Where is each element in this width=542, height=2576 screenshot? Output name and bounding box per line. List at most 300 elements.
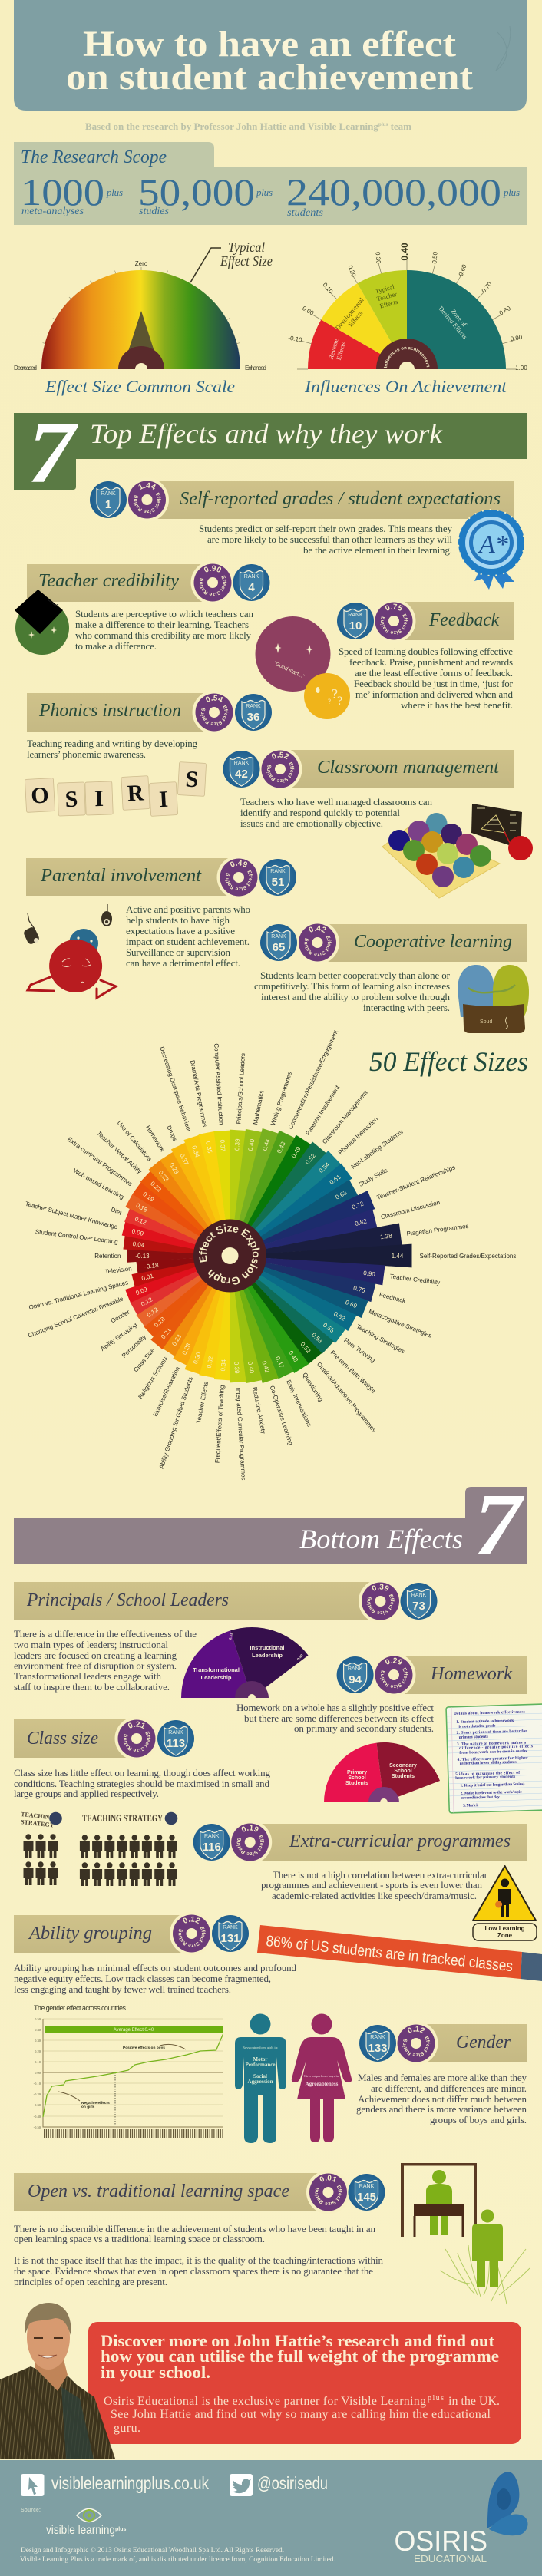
body text: Achievement does not differ much between [358, 2093, 527, 2105]
stat: 240,000,000 plus students: students [287, 207, 324, 219]
wedge values: 0.49 [290, 1145, 302, 1159]
effect size badge: 0.75 [385, 603, 403, 611]
icon: hugging characters in basket: Spud [480, 1019, 492, 1025]
body text: where it has the best benefit. [401, 699, 513, 711]
wedge values: 0.37 [178, 1152, 190, 1167]
chart: leadership fan: Leadership [200, 1674, 232, 1681]
annotations [58, 2044, 186, 2109]
icon: smiling face and yellow character: ? [328, 698, 331, 705]
effect size badge: Effect Size Rating [236, 1835, 264, 1856]
rank badge: 42 [235, 768, 248, 781]
wedge labels: Phonics Instruction [337, 1115, 379, 1156]
body text: There is not a high correlation between extra-curricular [273, 1869, 488, 1881]
body text [254, 969, 451, 1013]
heading: the research scope: The Research Scope [21, 147, 167, 167]
segment labels: Effects [335, 341, 347, 361]
wedge labels: Teacher Verbal Ability [95, 1130, 143, 1175]
body text: There is a difference in the effectiveness of the [14, 1628, 197, 1640]
rank badge: RANK [359, 2184, 375, 2189]
title text: How to have an effect [83, 24, 456, 64]
wedge values: 0.55 [322, 1322, 335, 1334]
subtitle: plus [378, 121, 388, 127]
scale values: 0.90 [510, 334, 524, 342]
effect size badge: 0.19 [241, 1825, 259, 1831]
icon: letter tiles spelling osiris: I [158, 787, 169, 812]
wedge labels: Not-Labelling Students [350, 1128, 404, 1171]
wedge labels: Piagetian Programmes [406, 1223, 469, 1237]
heading: Class size [27, 1729, 98, 1749]
body text: feedback. Praise, punishment and rewards [349, 656, 513, 668]
scale values: 0.30 [374, 252, 382, 264]
wedge values: 0.63 [334, 1189, 349, 1201]
wedge values: 0.30 [192, 1351, 203, 1365]
topic: teacher credibility [15, 563, 270, 655]
icon: male figure with boys' strengths [235, 2014, 286, 2143]
section header: top effects [14, 404, 527, 502]
footer [0, 2460, 542, 2576]
wedge values: 0.22 [149, 1180, 163, 1194]
cta body: Osiris Educational is the exclusive partner for Visible Learning [104, 2395, 426, 2408]
panel: call to action [88, 2322, 521, 2444]
rank badge [260, 924, 297, 961]
icon: large class pictogram [80, 1812, 177, 1886]
wedge labels: Use of Calculators [116, 1119, 153, 1162]
hub: effect size explosion graph: Effect Size Explosion Graph [199, 1224, 259, 1285]
stat: 50,000 plus studies: plus [256, 187, 273, 198]
icon: letter tiles spelling osiris: I [94, 786, 104, 811]
icon: notebook with homework notes: 3. Mark it [463, 1803, 478, 1808]
wedge values: 0.18 [134, 1202, 149, 1214]
wedge labels: Open vs. Traditional Learning Spaces [28, 1279, 129, 1311]
source: visible learning plus logo [21, 2508, 126, 2537]
body text: me’ information and delivered when and [355, 689, 513, 700]
chart: leadership fan: Instructional [250, 1644, 285, 1651]
icon: hugging characters in basket [458, 965, 529, 1033]
wedge values: 0.28 [181, 1342, 193, 1356]
wedge values: 0.69 [344, 1299, 359, 1309]
chart: primary and secondary fan: Students [345, 1781, 368, 1786]
body text: Transformational leaders engage with [14, 1670, 161, 1682]
effect size badge: Effect Size Rating [178, 1927, 206, 1947]
body text: issues and are emotionally objective. [240, 817, 383, 829]
caption: effect size common scale: Effect Size Common Scale [45, 377, 235, 396]
icon: male figure with boys' strengths: Performance [246, 2062, 275, 2068]
chart: primary and secondary fan: School [394, 1769, 412, 1774]
effect size badge: 0.12 [407, 2026, 425, 2034]
wedge labels: Teacher Subject Matter Knowledge [25, 1200, 119, 1230]
rank badge: 36 [247, 711, 259, 724]
cta heading [101, 2331, 499, 2382]
chart: effect size common scale gauge [14, 239, 273, 396]
cta body: in the UK. [448, 2395, 500, 2408]
cta heading: Discover more on John Hattie’s research and find out [101, 2331, 495, 2350]
heading: Open vs. traditional learning space [28, 2181, 289, 2201]
wedge labels: Pre-term Birth Weight [329, 1349, 377, 1395]
effect size badge: Effect Size Rating [123, 1732, 150, 1752]
body text: genders and there is more variance between [356, 2103, 527, 2115]
icon: smiling face and yellow character: ? [332, 686, 338, 702]
effect size badge [375, 602, 413, 640]
chart: leadership fan: 0.11 [228, 1633, 233, 1640]
segment labels: Effects [346, 309, 364, 329]
wedge values: 0.61 [329, 1174, 342, 1186]
chart: gender effect across countries: 0.30 [35, 2039, 41, 2043]
effect size badge: Effect Size Rating [134, 493, 161, 514]
wedge values: 0.40 [246, 1361, 256, 1374]
heading: 50 effect sizes: 50 Effect Sizes [369, 1046, 528, 1077]
chart: gender effect across countries: -0.40 [34, 2115, 41, 2119]
body text: but there are some differences between its effect [244, 1712, 434, 1724]
stat: 50,000 plus studies: studies [139, 206, 170, 217]
rank badge: 51 [272, 876, 284, 889]
chart: gender effect across countries: -0.50 [34, 2125, 41, 2129]
wedge labels: Co-Operative Learning [269, 1385, 294, 1446]
wedge labels: Drama/Arts Programmes [189, 1059, 208, 1128]
body text: Students predict or self-report their own grades. This means they [199, 523, 453, 534]
wedge values: 0.53 [310, 1332, 324, 1345]
icon: notebook with homework notes: 2. Make it relevant to the work/topic [461, 1790, 522, 1796]
hub with label: Influences on achievement [384, 347, 430, 368]
scale values: 0.60 [458, 263, 468, 277]
chart: primary and secondary fan: Primary [347, 1770, 367, 1775]
topic: classroom management [223, 750, 533, 898]
chart: primary and secondary fan: Students [392, 1774, 415, 1779]
heading: Feedback [428, 610, 499, 630]
heading: Top Effects and why they work [90, 418, 443, 449]
wedge values: 0.39 [233, 1362, 240, 1374]
logo: osiris educational [395, 2472, 528, 2564]
rank badge: RANK [246, 704, 261, 709]
rank badge: 1 [105, 498, 111, 511]
website link: visiblelearningplus.co.uk [51, 2473, 209, 2493]
wedge labels: Study Skills [358, 1167, 388, 1188]
icon: graduate egg [15, 590, 69, 655]
body text: Class size has little effect on learning, though does affect working [14, 1767, 270, 1778]
effect size badge: 0.12 [183, 1916, 200, 1924]
effect size badge: Effect Size Rating [225, 870, 253, 891]
stat: 1000 plus meta-analyses: plus [106, 187, 123, 198]
wedge values: 1.28 [380, 1232, 393, 1240]
scale values: 0.00 [301, 305, 316, 317]
icon: notebook with homework notes: 4. The effects are greater for higher [457, 1755, 528, 1762]
topic: extra-curricular programmes [193, 1824, 537, 1941]
chart: gender effect across countries: 0.00 [35, 2071, 41, 2075]
wedge labels: Gender [110, 1309, 131, 1325]
effect size badge: 0.29 [385, 1658, 402, 1664]
effect size badge: 0.42 [309, 926, 326, 933]
icon: smiling face and yellow character: “Good start...” [273, 661, 306, 680]
wedge labels: Ability Grouping [99, 1322, 138, 1352]
photo: portrait of John Hattie [0, 2303, 116, 2459]
wedge labels: Principals/School Leaders [235, 1053, 246, 1125]
wedge labels: Computer Assisted Instruction [213, 1043, 225, 1125]
cta body: guru. [114, 2422, 140, 2435]
chart: primary and secondary fan: Secondary [389, 1763, 417, 1769]
icon: notebook with homework notes [446, 1704, 542, 1813]
wedge labels: Teacher Credibility [389, 1273, 441, 1286]
source: visible learning plus logo: plus [115, 2527, 126, 2532]
effect size badge [193, 563, 232, 602]
rank badge [337, 1656, 374, 1693]
body text: conditions. Teaching strategies should be maximised in small and [14, 1778, 270, 1789]
rank badge: RANK [234, 761, 250, 766]
heading: Phonics instruction [38, 701, 181, 721]
icon: notebook with homework notes: difference - greater positive effects [459, 1744, 533, 1751]
effect size badge: Effect Size Rating [200, 705, 229, 726]
callout: typical effect size: Effect Size [220, 253, 273, 269]
heading: Extra-curricular programmes [289, 1831, 511, 1851]
effect size badge [118, 1719, 155, 1758]
body text: competitively. This form of learning also increases [254, 980, 450, 992]
wedge labels: Decreasing Disruptive Behaviour [158, 1045, 193, 1133]
body text: Students are perceptive to which teachers can [75, 608, 253, 619]
segment labels [327, 282, 475, 362]
wedge labels: Questioning [301, 1372, 325, 1403]
wedge values: 0.52 [299, 1341, 312, 1355]
rank badge: RANK [270, 869, 286, 874]
wedge values: 0.09 [134, 1286, 149, 1296]
icon: letter tiles spelling osiris: S [185, 767, 199, 792]
chart: gender effect across countries: 0.50 [35, 2017, 41, 2021]
wedge values: 0.54 [318, 1161, 331, 1174]
heading: Bottom Effects [299, 1524, 463, 1554]
body text: make a difference to their learning. Teachers [75, 619, 249, 630]
rank badge [337, 603, 374, 639]
body text: leaders are focused on creating a learning [14, 1650, 177, 1661]
body text: groups of boys and girls. [430, 2114, 527, 2125]
icon: notebook with homework notes: 1. Student attitude to homework [456, 1719, 514, 1725]
chart: gender effect across countries: 0.40 [35, 2028, 41, 2032]
body text: Homework on a whole has a slightly positive effect [236, 1702, 434, 1713]
scale values: 0.20 [346, 264, 357, 279]
wedge values: 0.90 [363, 1270, 376, 1278]
wedge values: 0.39 [233, 1138, 241, 1151]
legal text [20, 2546, 335, 2564]
callout: typical effect size: Typical [228, 239, 265, 255]
icon: blackboard and teacher [471, 804, 533, 860]
rank badge: RANK [348, 1666, 363, 1672]
panel: research scope [14, 142, 527, 225]
scale values: 0.40 [399, 243, 410, 261]
rank badge [349, 2174, 385, 2211]
segment labels: Reverse [327, 338, 340, 360]
wedge labels: Frequent/Effects of Teaching [214, 1385, 226, 1463]
body text [14, 2223, 384, 2287]
wedge values: 0.01 [140, 1273, 154, 1282]
wedge labels: Changing School Calendar/Timetable [27, 1295, 124, 1339]
wedge values: 0.32 [206, 1356, 215, 1369]
stat: 1000 plus meta-analyses: meta-analyses [21, 206, 84, 217]
body text: Teachers who have well managed classrooms can [240, 796, 433, 807]
heading: Self-reported grades / student expectations [180, 489, 501, 509]
wedge labels: Teacher Effects [195, 1381, 210, 1424]
title text: on student achievement [66, 57, 473, 97]
rank badge: 133 [368, 2042, 388, 2055]
effect size badge: 0.39 [372, 1584, 388, 1590]
icon: indoor and outdoor learners [401, 2163, 530, 2304]
rank badge: 94 [349, 1673, 362, 1686]
icon: notebook with homework notes: is not related to grade [458, 1724, 496, 1729]
effect size badge: 0.90 [204, 565, 221, 573]
rank badge [157, 1720, 194, 1757]
chart: leadership fan [181, 1627, 309, 1698]
body text: Active and positive parents who [126, 903, 250, 915]
effect size badge [362, 1583, 399, 1620]
body text: staff to inspire them to be collaborative. [14, 1681, 170, 1693]
body text: can have a detrimental effect. [126, 957, 240, 969]
icon: male figure with boys' strengths: Boys outperform girls in: [243, 2046, 278, 2049]
wedge values: 0.52 [304, 1152, 317, 1166]
icon: male figure with boys' strengths: Motor [253, 2056, 268, 2062]
rank badge: RANK [411, 1593, 427, 1598]
body text: It is not the space itself that has the impact, it is the quality of the teaching/interactions within [14, 2254, 384, 2266]
icon: small class pictogram: TEACHING [21, 1811, 55, 1821]
chart: gender effect across countries: -0.10 [34, 2082, 41, 2086]
scale values: 0.50 [431, 251, 439, 264]
heading: Parental involvement [40, 866, 202, 886]
wedge labels: Parental Involvement [304, 1084, 342, 1137]
chart: effect size common scale gauge: Decreased [14, 365, 37, 372]
topic: class size [14, 1719, 270, 1886]
body text: the space. Evidence shows that even in open classroom spaces there is no guarantee that the [14, 2265, 373, 2277]
body text [240, 796, 433, 829]
heading: Classroom management [317, 758, 500, 778]
wedge labels: Ability Grouping for Gifted Students [158, 1376, 194, 1470]
wedge labels: Feedback [378, 1291, 407, 1305]
body text: Students learn better cooperatively than alone or [260, 969, 451, 981]
rank badge [90, 481, 127, 518]
rank badge: RANK [223, 1925, 238, 1930]
section header: bottom effects [14, 1476, 527, 1574]
body text [261, 1869, 488, 1901]
topic: ability grouping [14, 1914, 542, 1995]
topic: phonics instruction [25, 693, 272, 817]
chart: leadership fan: Transformational [193, 1666, 240, 1673]
chart: effect size common scale gauge: Enhanced [245, 365, 266, 372]
rank badge [212, 1915, 249, 1952]
chart: gender effect across countries: -0.20 [34, 2092, 41, 2096]
subtitle: Based on the research by Professor John Hattie and Visible Learning [85, 121, 378, 132]
segment labels: Developmental [334, 296, 365, 332]
body text [75, 608, 253, 652]
chart: effect size explosion graph [25, 1029, 516, 1481]
wedge labels: Homework [144, 1125, 167, 1154]
body text: to make a difference. [75, 640, 157, 652]
wedge values: 0.34 [220, 1359, 227, 1372]
effect size badge [261, 751, 299, 788]
stat: 240,000,000 plus students: 240,000,000 [286, 170, 501, 213]
wedge labels: Reducing Anxiety [251, 1386, 267, 1435]
rank badge: 131 [220, 1932, 240, 1945]
rank badge [233, 564, 270, 601]
wedge values: 0.18 [153, 1316, 167, 1329]
wedge labels: Teaching Strategies [355, 1323, 406, 1355]
hub with label [376, 339, 438, 369]
wedge labels: Drugs [165, 1125, 178, 1142]
heading: Principals / School Leaders [26, 1590, 229, 1610]
body text: on primary and secondary students. [294, 1722, 434, 1734]
icon: rosette [458, 510, 524, 590]
body text: are different, and differences are minor. [371, 2082, 527, 2094]
wedge labels: Outdoor/Adventure Programmes [316, 1361, 378, 1434]
wedge values: 0.35 [204, 1141, 213, 1154]
icon: notebook with homework notes: rather than lower ability students [460, 1760, 517, 1766]
rank badge: 4 [248, 581, 255, 594]
body text: Surveillance or supervision [126, 946, 230, 958]
wedge labels: Extra-curricular Programmes [66, 1136, 134, 1187]
effect size badge: Effect Size Rating [402, 2036, 430, 2057]
wedge values: -0.13 [135, 1253, 150, 1260]
rank badge [193, 1824, 230, 1861]
icon: low learning zone sign [473, 1866, 537, 1940]
body text: Males and females are more alike than they [358, 2072, 527, 2083]
body text: open learning space vs a traditional learning space or classroom. [14, 2233, 265, 2244]
wedge values: 0.29 [168, 1161, 180, 1176]
needle [125, 311, 157, 361]
effect size badge [375, 1656, 413, 1693]
wedge values: 0.37 [219, 1139, 226, 1152]
rank badge: RANK [204, 1834, 220, 1839]
twitter handle: @osirisedu [257, 2473, 328, 2493]
body text [356, 2072, 527, 2125]
rank badge [235, 694, 272, 731]
topic: parental involvement [24, 858, 296, 1000]
chart: gender effect across countries: 0.10 [35, 2060, 41, 2064]
rank badge: RANK [244, 574, 259, 580]
rank badge: 113 [167, 1737, 185, 1750]
wedge values: 0.48 [287, 1349, 299, 1364]
body text: programmes and achievement - sports is even lower than [261, 1879, 482, 1891]
icon: small class pictogram [21, 1811, 62, 1885]
chart: primary and secondary fan: School [348, 1775, 366, 1781]
icon: notebook with homework notes: from homework can be seen in maths [459, 1749, 527, 1755]
rank badge: RANK [101, 491, 116, 497]
icon: notebook with homework notes: covered in class that day [461, 1795, 500, 1801]
wedge labels: Class Size [132, 1346, 157, 1373]
scale values: 0.80 [498, 305, 512, 317]
wedge values: 0.82 [354, 1217, 368, 1227]
topic: self-reported grades [90, 481, 524, 590]
body text [14, 1628, 197, 1693]
wedge values: -0.18 [144, 1262, 160, 1270]
chart: gender effect across countries: -0.30 [34, 2103, 41, 2107]
effect size badge: Effect Size Rating [304, 935, 332, 956]
segment labels: Effects [378, 298, 398, 310]
rank badge: RANK [168, 1730, 183, 1735]
effect size badge [220, 858, 258, 897]
wedge labels: Mathematics [252, 1090, 266, 1125]
annotations: on girls [81, 2105, 95, 2109]
legal text: Design and Infographic © 2013 Osiris Educational Woodhall Spa Ltd. All Rights Reserved. [21, 2546, 284, 2555]
wedge labels: Religious Schools [137, 1356, 169, 1400]
logo: osiris educational: OSIRIS [395, 2525, 487, 2557]
wedge values: 0.12 [146, 1306, 160, 1319]
effect size badge [231, 1824, 269, 1861]
chart: primary and secondary fan [324, 1742, 440, 1802]
body text: large groups and applied respectively. [14, 1788, 159, 1799]
wedge labels: Television [104, 1265, 132, 1276]
rank badge: 145 [357, 2191, 376, 2204]
icon: notebook with homework notes: Details about homework effectiveness [454, 1710, 525, 1716]
cta body [104, 2394, 500, 2435]
segment labels: Zone of [449, 307, 468, 328]
topic: feedback [255, 602, 514, 719]
icon: letter tiles spelling osiris: S [64, 787, 78, 812]
wedge values: 0.19 [141, 1191, 156, 1204]
twitter handle [230, 2473, 328, 2496]
wedge values: 0.12 [134, 1215, 147, 1227]
icon: letter tiles spelling osiris [25, 762, 207, 816]
